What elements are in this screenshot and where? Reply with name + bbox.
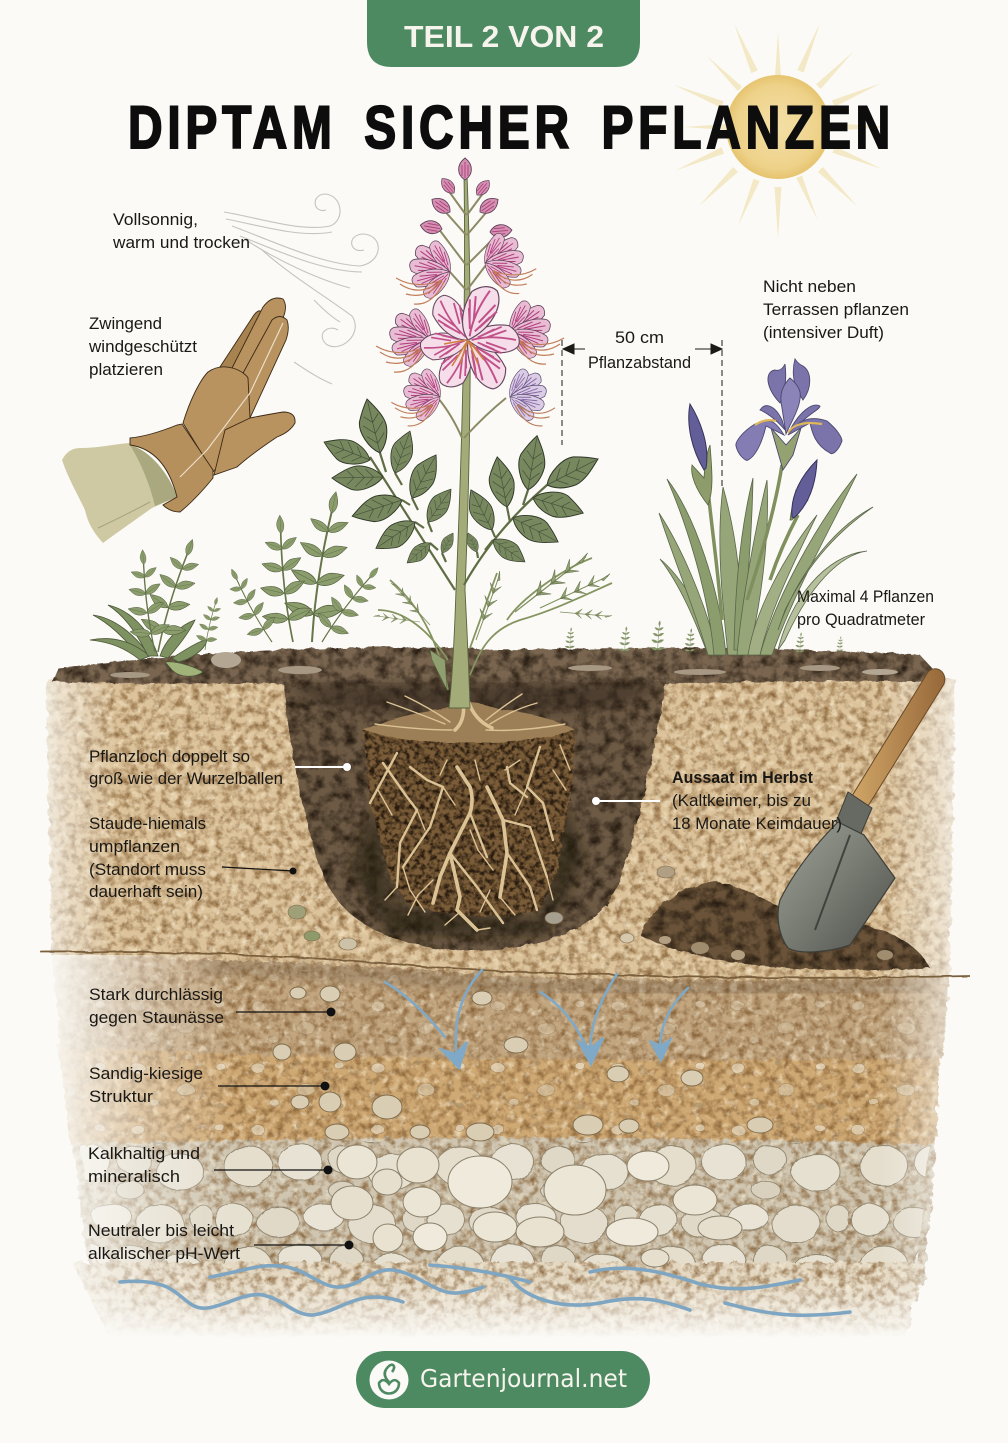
groundwater waves <box>120 1265 850 1315</box>
label: pH <box>88 1221 354 1263</box>
plant: small seedlings <box>565 621 843 656</box>
thin lower branches <box>373 547 614 690</box>
main stem <box>449 175 470 708</box>
plant: left ground cover <box>90 487 389 676</box>
label: transplant: umpflanzen <box>89 837 180 856</box>
label: transplant: (Standort muss <box>89 860 206 879</box>
iris bud right <box>790 460 817 520</box>
label: drainage: Stark durchlässig <box>89 985 223 1004</box>
label: planting hole: Pflanzloch doppelt so <box>89 747 250 766</box>
top badge <box>367 0 640 67</box>
label: structure: Struktur <box>89 1087 153 1106</box>
iris bloom <box>736 359 842 470</box>
label: sun: Vollsonnig, <box>113 210 198 229</box>
root ball <box>363 694 575 930</box>
label: spacing: 50 cm <box>615 328 664 347</box>
label: sowing: (Kaltkeimer, bis zu <box>672 791 811 810</box>
big stones in cobble layer <box>331 1145 742 1267</box>
layer: sandy gravel <box>58 1045 940 1145</box>
label: sowing <box>592 768 842 833</box>
soil mound <box>640 882 930 970</box>
label: wind: platzieren <box>89 360 163 379</box>
iris plant <box>659 359 873 655</box>
flowers <box>376 231 564 426</box>
label: lime: mineralisch <box>88 1167 180 1186</box>
top soil <box>52 647 945 684</box>
label: wind <box>88 314 197 379</box>
label: density: Maximal 4 Pflanzen <box>797 587 934 606</box>
flower side stems <box>438 190 506 438</box>
water arrows <box>385 970 688 1068</box>
iris bud left <box>689 404 712 505</box>
edge fades <box>30 670 980 1350</box>
label: transplant: Staude-hiemals <box>89 814 206 833</box>
foliage <box>320 396 604 590</box>
planting hole <box>283 682 665 950</box>
sun <box>673 22 890 239</box>
label: terrace: Nicht neben <box>763 277 856 296</box>
label: drainage <box>89 985 336 1027</box>
horizon line <box>40 952 970 978</box>
label: structure: Sandig-kiesige <box>89 1064 203 1083</box>
icon: shovel <box>778 669 945 952</box>
label: transplant <box>89 814 296 901</box>
spacing marker <box>562 340 722 486</box>
small stones by the hole <box>288 866 675 950</box>
label: transplant: dauerhaft sein) <box>89 882 203 901</box>
soil layers <box>30 647 980 1350</box>
label: sowing: Aussaat im Herbst <box>672 768 813 787</box>
plant A strap leaves <box>90 605 207 676</box>
diptam plant <box>320 158 614 708</box>
label: sun <box>112 210 250 252</box>
label: terrace: (intensiver Duft) <box>763 323 884 342</box>
label: spacing: Pflanzabstand <box>588 353 691 372</box>
label: planting hole <box>89 747 351 788</box>
label: lime <box>88 1144 332 1186</box>
buds <box>419 158 512 238</box>
iris leaves <box>659 474 873 655</box>
label: pH: alkalischer pH-Wert <box>88 1244 240 1263</box>
layer: limestone cobbles <box>72 1135 936 1285</box>
roots <box>370 694 570 930</box>
glove <box>130 298 295 512</box>
sleeve <box>62 443 177 543</box>
label: terrace: Terrassen pflanzen <box>763 300 909 319</box>
label: lime: Kalkhaltig und <box>88 1144 200 1163</box>
layer: permeable soil <box>52 958 950 1060</box>
footer badge: Gartenjournal.net <box>420 1364 627 1393</box>
label: wind: Zwingend <box>89 314 162 333</box>
layer: bottom pale zone <box>72 1262 925 1338</box>
icon: wind <box>224 194 378 384</box>
icon: logo <box>370 1360 408 1400</box>
footer badge <box>356 1351 650 1408</box>
label: density: pro Quadratmeter <box>797 610 925 629</box>
label: planting hole: groß wie der Wurzelballen <box>89 769 283 788</box>
iris stems <box>708 465 798 620</box>
icon: glove with sleeve <box>62 298 295 543</box>
label: drainage: gegen Staunässe <box>89 1008 224 1027</box>
label: spacing <box>585 325 695 375</box>
label: pH: Neutraler bis leicht <box>88 1221 234 1240</box>
label: wind: windgeschützt <box>88 337 197 356</box>
label: density <box>797 587 934 629</box>
layer: upper sandy soil <box>46 678 955 980</box>
label: terrace <box>763 277 909 342</box>
gravel stones <box>273 986 773 1141</box>
top badge: TEIL 2 VON 2 <box>404 19 604 54</box>
label: sun: warm und trocken <box>112 233 250 252</box>
label: structure <box>89 1064 330 1106</box>
label: sowing: 18 Monate Keimdauer) <box>672 814 842 833</box>
